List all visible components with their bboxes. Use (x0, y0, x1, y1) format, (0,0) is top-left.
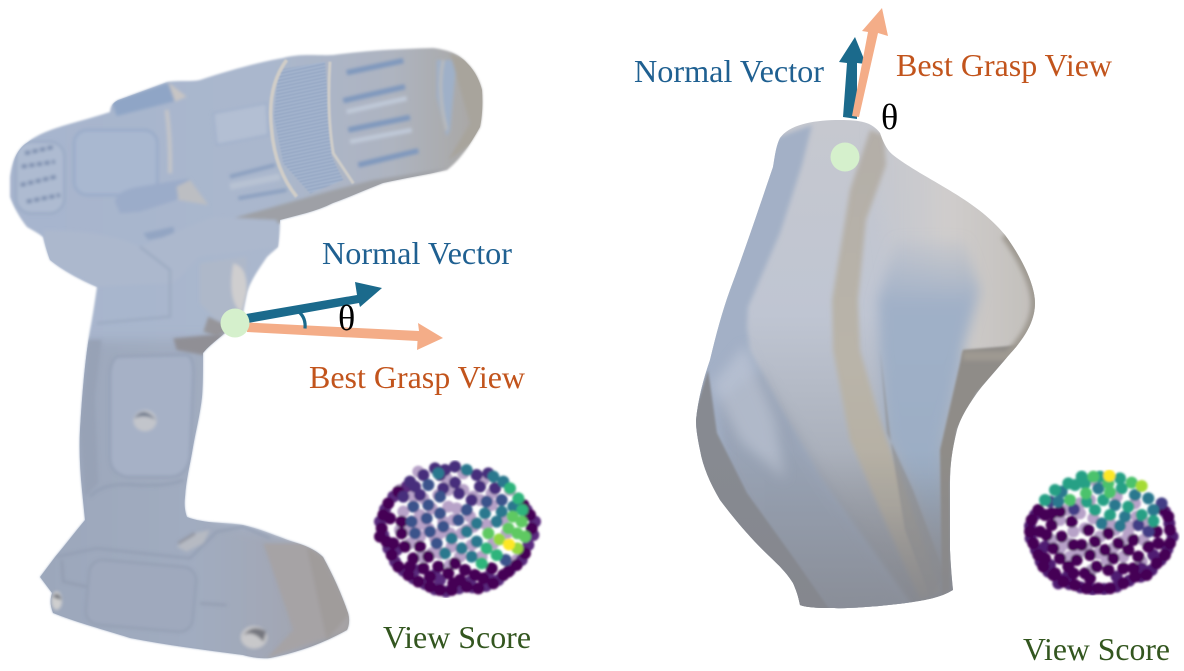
label: view score: View Score (1023, 632, 1170, 667)
rear vent (16, 142, 64, 213)
label: normal vector: Normal Vector (322, 236, 513, 271)
back-side dots (400, 470, 517, 565)
grasp point marker (830, 142, 860, 172)
grip panel (114, 362, 190, 468)
chuck tip (437, 60, 457, 137)
battery latch (177, 530, 210, 552)
left dark strip (690, 125, 913, 612)
lime dots (499, 539, 517, 548)
back-side dots (1052, 482, 1147, 570)
grip hole (133, 410, 157, 431)
angle arc (299, 312, 305, 328)
panel: twisted vase with vectors (634, 8, 1173, 667)
shadow under grip joint (173, 333, 227, 355)
blue-teal dots (1058, 488, 1153, 526)
spine shading (80, 340, 100, 426)
trigger (200, 257, 247, 323)
grasp point marker (220, 308, 250, 338)
chuck slots (343, 61, 418, 165)
battery top edge (209, 525, 268, 540)
battery bottom shade (53, 617, 347, 663)
grip ridges (90, 480, 183, 497)
battery plate (85, 559, 197, 633)
arrow: normal vector (blue) (246, 282, 382, 323)
beige band (830, 130, 912, 555)
label: best grasp view: Best Grasp View (896, 48, 1112, 83)
purple dots (380, 492, 532, 590)
label: normal vector: Normal Vector (634, 54, 825, 89)
label: theta: θ (338, 298, 355, 338)
drill shading and surface detail (16, 53, 487, 670)
peak score dot (1091, 458, 1127, 494)
right dark strip (940, 345, 1020, 595)
green dots (1070, 477, 1132, 500)
body panels (213, 103, 268, 145)
vase shading bands (690, 125, 1045, 615)
indigo dots (1050, 502, 1162, 532)
top ridge (112, 83, 187, 116)
indigo dots (403, 467, 495, 500)
arrow: normal vector (blue) (839, 37, 866, 119)
purple dots (1030, 508, 1170, 588)
side panel (74, 130, 157, 195)
blue dots (412, 485, 506, 560)
lower handle and battery tone (30, 340, 360, 670)
right shoulder highlight (918, 172, 1035, 349)
chart: view score sphere (drill) (380, 467, 535, 592)
green dots (482, 488, 522, 563)
chuck underside shadow (227, 168, 448, 223)
grey band beside beige (882, 368, 932, 552)
label: theta: θ (881, 97, 898, 137)
chart: view score sphere (vase) (1030, 476, 1173, 589)
back ring dots (1030, 512, 1173, 589)
illustration: twisted vase model (690, 120, 1045, 615)
illustration: power drill model (10, 48, 487, 670)
drill silhouette (10, 48, 482, 658)
panel: power drill with vectors (10, 48, 535, 670)
lower left fade (721, 376, 864, 560)
knurled ring (271, 60, 353, 197)
peak score dot (491, 526, 527, 562)
right rim (963, 235, 1035, 356)
arrow: best grasp view (orange) (247, 322, 443, 350)
battery right end (264, 542, 308, 656)
teal dots (438, 470, 513, 557)
lower left edge strip (694, 370, 830, 610)
label: view score: View Score (383, 620, 531, 655)
front ledge (115, 178, 190, 213)
arrow: best grasp view (orange) (852, 8, 888, 117)
lower body darkening (690, 450, 960, 615)
lime dot (1124, 468, 1160, 504)
back ring dots (380, 487, 535, 592)
vase silhouette (696, 120, 1035, 608)
light green dots (488, 517, 525, 537)
inner lobe (714, 352, 784, 472)
label: best grasp view: Best Grasp View (309, 360, 525, 395)
seam (167, 110, 170, 173)
teal dots (1045, 477, 1153, 521)
collar (43, 217, 278, 287)
battery holes (51, 591, 62, 610)
blue band (874, 246, 982, 500)
